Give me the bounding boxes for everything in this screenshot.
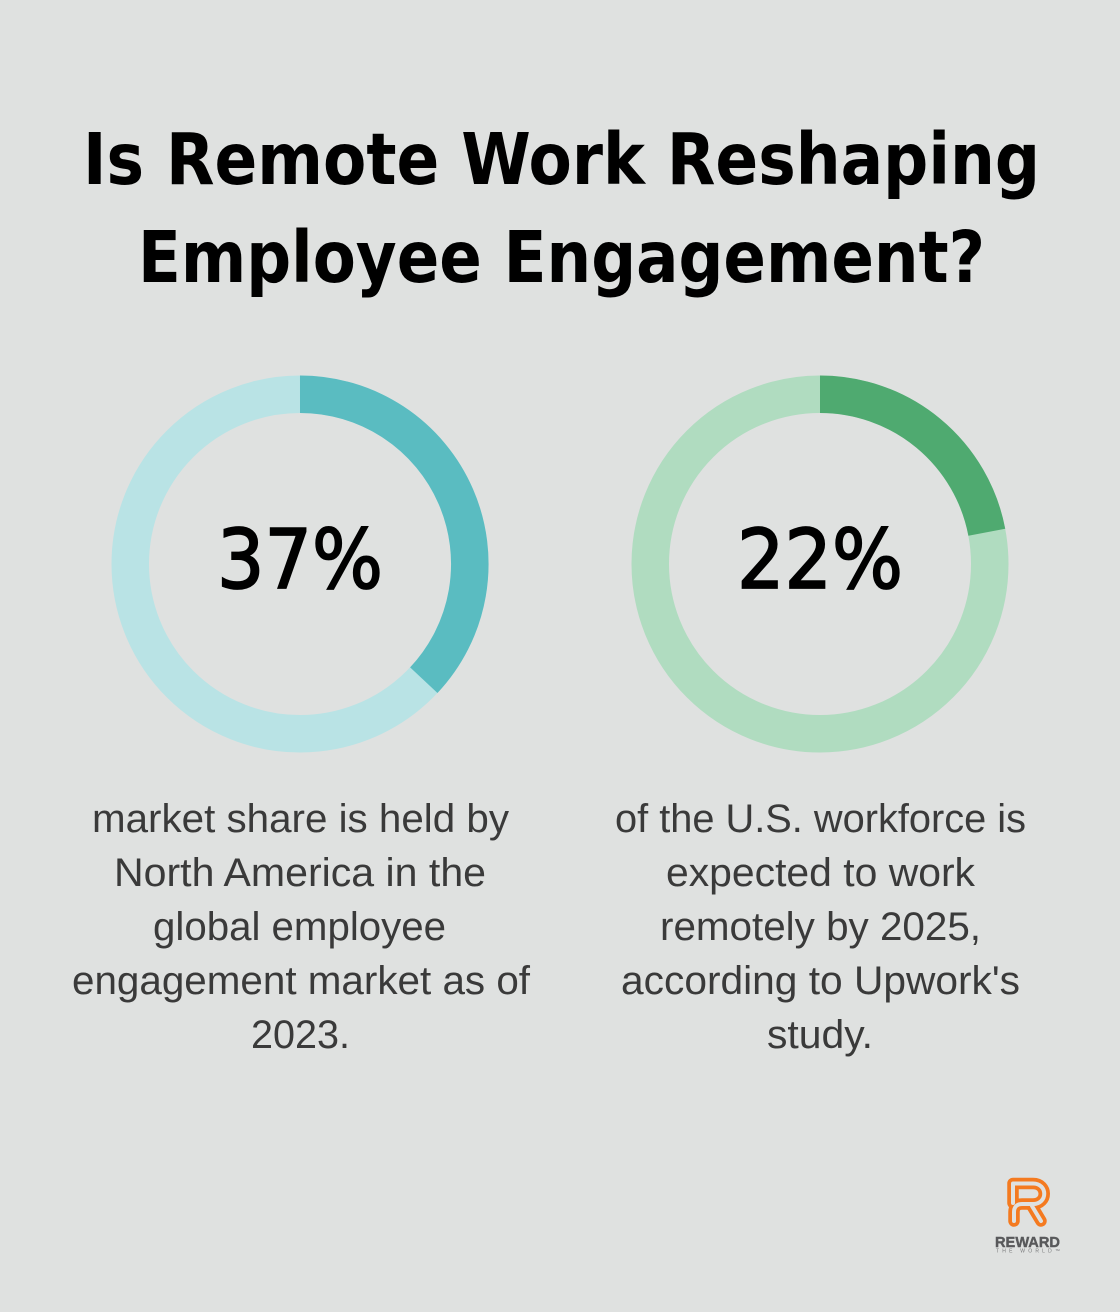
title: Employee Engagement? xyxy=(138,216,985,299)
description: U.S. workforce: of the U.S. workforce is xyxy=(615,797,1026,841)
donut chart: 22% xyxy=(650,394,990,734)
description: North America xyxy=(72,797,531,1057)
value: 37%: 37% xyxy=(217,513,383,608)
description: U.S. workforce: study. xyxy=(767,1013,873,1057)
wordmark: REWARD xyxy=(995,1234,1060,1251)
description: U.S. workforce xyxy=(615,797,1026,1057)
description: U.S. workforce: remotely by 2025, xyxy=(660,905,981,949)
description: U.S. workforce: according to Upwork's xyxy=(621,959,1020,1003)
logo: Reward the World xyxy=(995,1184,1060,1254)
description: U.S. workforce: expected to work xyxy=(666,851,976,895)
title xyxy=(83,118,1040,299)
panel: U.S. remote workforce xyxy=(615,394,1026,1057)
value: 22%: 22% xyxy=(737,513,903,608)
donut chart: 37% xyxy=(130,394,470,734)
description: North America: North America in the xyxy=(114,851,486,895)
tagline: THE WORLD™ xyxy=(996,1248,1060,1254)
panel: North America market share xyxy=(72,394,531,1057)
icon: orange R mark xyxy=(1013,1184,1044,1221)
description: North America: global employee xyxy=(153,905,446,949)
description: North America: 2023. xyxy=(251,1013,350,1057)
description: North America: market share is held by xyxy=(92,797,509,841)
description: North America: engagement market as of xyxy=(72,959,531,1003)
